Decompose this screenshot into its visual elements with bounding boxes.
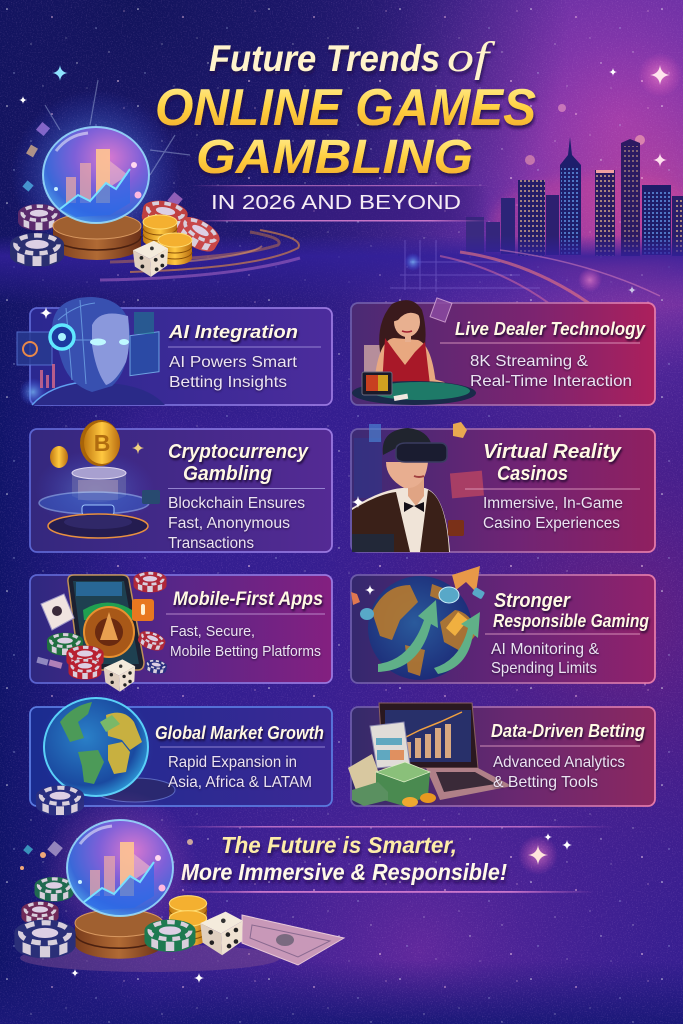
card title: Casinos [497, 463, 568, 485]
icon: phone with roulette wheel, chips and dice [36, 572, 168, 692]
card title: Responsible Gaming [493, 611, 649, 631]
card text: Betting Insights [169, 374, 287, 391]
card text: Real-Time Interaction [470, 373, 632, 390]
card text: Asia, Africa & LATAM [168, 774, 312, 791]
card title: Stronger [494, 590, 571, 612]
footer message: The Future is Smarter, [221, 832, 457, 858]
panel: Mobile-First Apps [30, 572, 332, 692]
panel: Global Market Growth [30, 689, 332, 816]
card text: AI Monitoring & [491, 641, 599, 658]
card text: Advanced Analytics [493, 754, 625, 771]
card title [168, 441, 309, 485]
city skyline [466, 137, 683, 275]
icon: AI robot head [17, 297, 165, 406]
subtitle band: IN 2026 AND BEYOND [211, 192, 461, 214]
card text [169, 354, 298, 391]
card title: AI Integration [168, 322, 298, 342]
panel: Live Dealer Technology [351, 298, 655, 405]
card text: Blockchain Ensures [168, 495, 305, 512]
icon: bitcoin on hologram platform [35, 420, 160, 538]
card title: Virtual Reality [483, 441, 622, 463]
card text: Rapid Expansion in [168, 754, 297, 771]
panel: Data-Driven Betting [348, 703, 655, 807]
card title: Live Dealer Technology [455, 319, 646, 339]
subtitle band [190, 185, 490, 222]
card text: Mobile Betting Platforms [170, 643, 321, 660]
card text: Immersive, In-Game [483, 495, 623, 512]
footer message: More Immersive & Responsible! [181, 859, 507, 885]
card text: Casino Experiences [483, 515, 620, 532]
icon: earth globe on chip [36, 689, 175, 816]
card title: Mobile-First Apps [173, 589, 323, 610]
card text [491, 641, 599, 677]
crystal ball with chips, coins and dice [10, 80, 224, 277]
title line: Future Trends of: of [447, 35, 496, 81]
footer crystal ball with chips, coins, dice and banknote [14, 790, 344, 972]
card text [168, 495, 305, 552]
icon: bitcoin on hologram platform: B [94, 430, 110, 456]
panel: Cryptocurrency Gambling [30, 420, 332, 552]
card title: Data-Driven Betting [491, 721, 645, 741]
panel: Stronger Responsible Gaming [351, 566, 655, 683]
card text: Fast, Anonymous [168, 515, 290, 532]
footer message [175, 826, 615, 893]
panel: Virtual Reality Casinos [351, 422, 655, 552]
card text: 8K Streaming & [470, 353, 588, 370]
card text: Spending Limits [491, 660, 597, 677]
card text: & Betting Tools [493, 774, 598, 791]
title line: GAMBLING: GAMBLING [196, 131, 473, 184]
title line: ONLINE GAMES: ONLINE GAMES [155, 79, 536, 137]
card title: Gambling [183, 463, 272, 485]
card text [470, 353, 632, 390]
icon: man wearing VR headset [352, 422, 484, 552]
title [155, 35, 536, 222]
title line: Future Trends of: Future Trends [209, 38, 440, 79]
card text [168, 754, 312, 791]
card text: Fast, Secure, [170, 623, 255, 640]
panel: AI Integration [17, 297, 332, 406]
card text: AI Powers Smart [169, 354, 298, 371]
card title [483, 441, 622, 485]
icon: live dealer at table [352, 298, 476, 405]
card text [493, 754, 625, 791]
card text: Transactions [168, 535, 254, 552]
card title [493, 590, 649, 631]
card text [483, 495, 623, 532]
icon: laptop, tablet and cash [348, 703, 512, 807]
icon: globe with growth arrows [351, 566, 485, 680]
card text [170, 623, 321, 660]
ground and light trails [0, 230, 683, 305]
card title: Global Market Growth [155, 723, 324, 743]
card title: Cryptocurrency [168, 441, 309, 463]
